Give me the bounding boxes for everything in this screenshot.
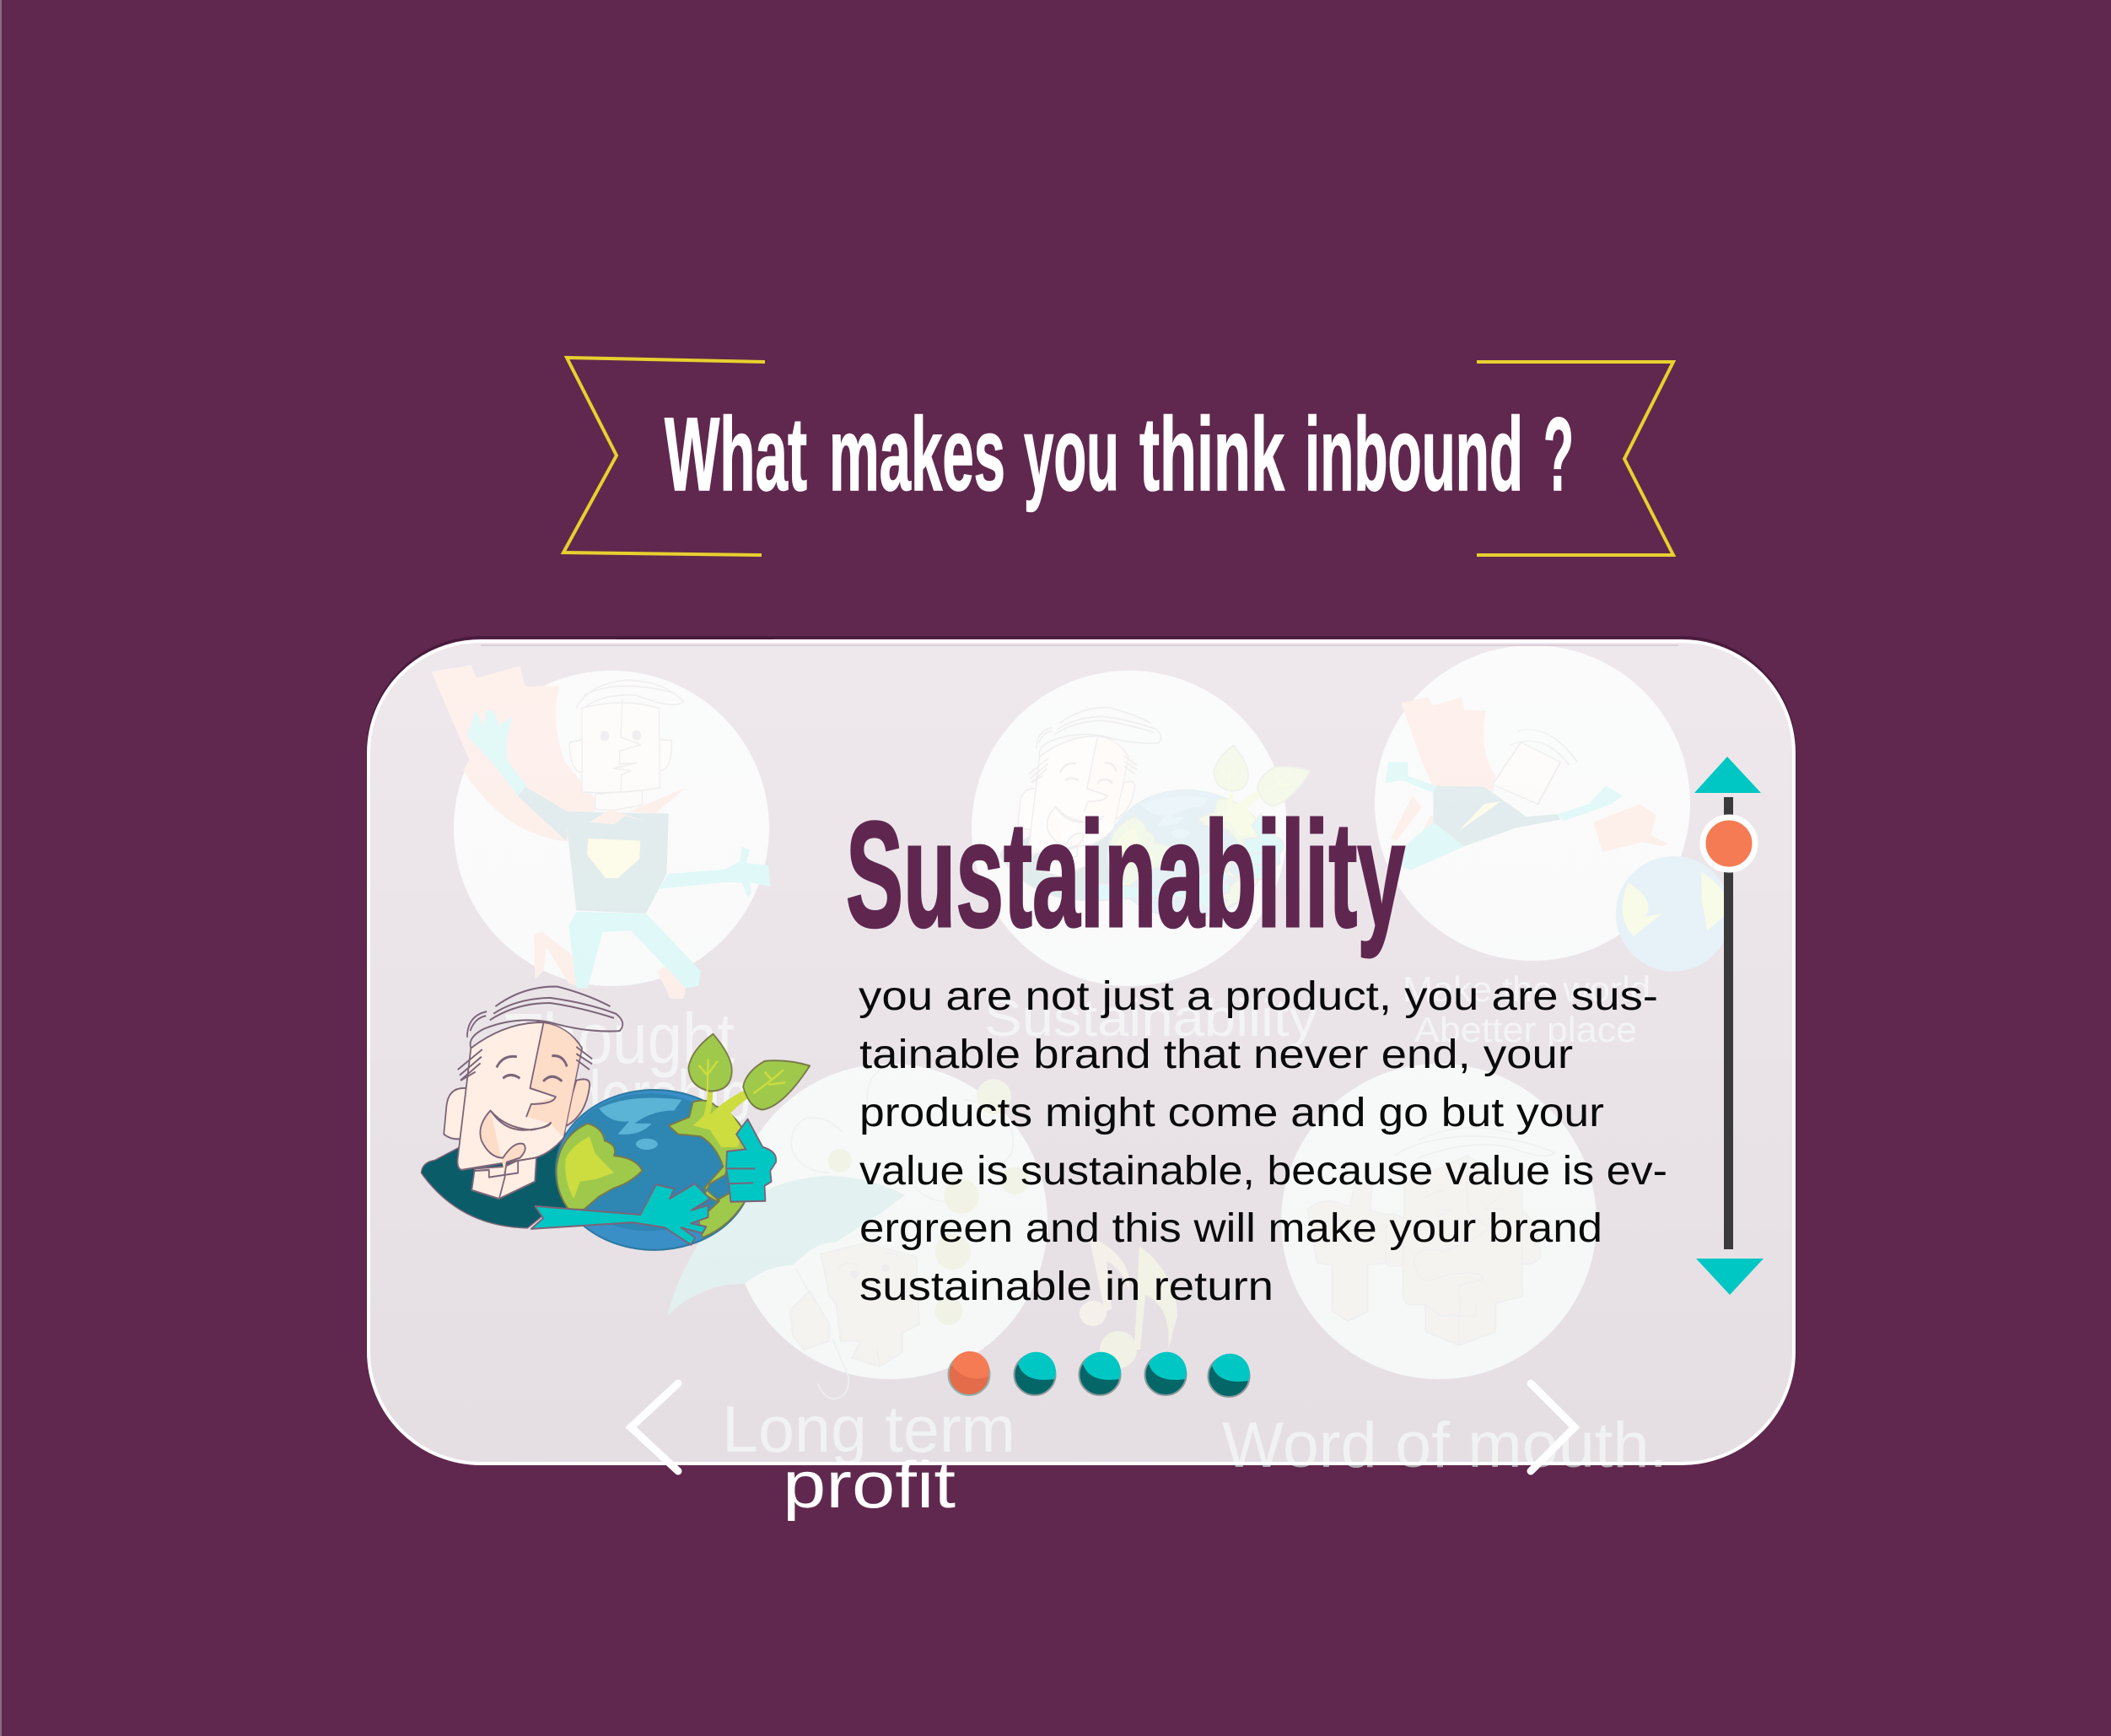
- arrow: next: [1531, 1383, 1575, 1471]
- faded slide layer behind the panel: [432, 645, 1731, 1522]
- hand gripping globe: [726, 1119, 776, 1202]
- globe highlights: [599, 1097, 681, 1135]
- arrow: previous: [631, 1383, 678, 1471]
- right ear: [565, 1079, 590, 1125]
- body text: products might come and go but your: [859, 1091, 1604, 1135]
- pagination dots: [948, 1351, 1250, 1397]
- faded circle: thought leadership: [432, 665, 770, 999]
- title: think: [1139, 397, 1284, 513]
- globe: [556, 1090, 753, 1250]
- faded label: Word of mouth: Word of mouth.: [1222, 1410, 1667, 1481]
- illustration: man hugging globe: [421, 987, 810, 1250]
- body text: tainable brand that never end, your: [859, 1032, 1573, 1077]
- body text: value is sustainable, because value is ev-: [859, 1149, 1667, 1194]
- dot 2: [1014, 1352, 1056, 1395]
- scroll up arrow: [1694, 757, 1761, 793]
- label: profit: profit: [783, 1448, 956, 1522]
- eyes and brows: [497, 1056, 567, 1081]
- hugging arm: [531, 1183, 710, 1245]
- face: [458, 1022, 582, 1170]
- body text: ergreen and this will make your brand: [859, 1206, 1602, 1251]
- faded circle: word of mouth: [1281, 1064, 1597, 1379]
- banner right bracket: [1477, 362, 1673, 555]
- man's body: [421, 1132, 576, 1228]
- title banner: ?: [1543, 397, 1574, 513]
- faded label: Long term: Long term: [722, 1392, 1015, 1466]
- left continent: [557, 1124, 642, 1210]
- faded circle: make the world a better place: [1375, 645, 1731, 972]
- body text: [859, 974, 1667, 1309]
- title: What: [665, 397, 807, 513]
- faded label: Thought leadership: leadership: [498, 1056, 751, 1135]
- faded label: Make the world, A better place: Abetter place: [1414, 1010, 1637, 1049]
- faded music notes: [1080, 1236, 1177, 1368]
- title: [665, 397, 1574, 513]
- hair: [458, 987, 622, 1081]
- left ear: [444, 1088, 466, 1139]
- banner left bracket: [563, 358, 765, 555]
- right continent: [669, 1101, 747, 1237]
- scrollbar: [1694, 757, 1764, 1295]
- dot 5: [1208, 1354, 1250, 1397]
- faded circle: long term profit: [667, 1064, 1177, 1399]
- scroll track: [1724, 797, 1733, 1249]
- mouth: [480, 1111, 551, 1174]
- dot: active: [948, 1351, 990, 1395]
- heading: Sustainability: Sustainability: [846, 790, 1405, 958]
- title: you: [1024, 397, 1119, 513]
- faded label: Sustainability: Sustainability: [984, 989, 1317, 1048]
- scroll knob: [1703, 817, 1755, 870]
- dot 3: [1080, 1352, 1121, 1395]
- body text: you are not just a product, you are sus-: [859, 974, 1658, 1019]
- faded circle: sustainability: [972, 671, 1311, 986]
- title banner: [563, 358, 1673, 555]
- dot 4: [1145, 1352, 1187, 1395]
- neck: [471, 1151, 537, 1199]
- body text: sustainable in return: [859, 1264, 1274, 1309]
- title: makes: [829, 397, 1005, 513]
- title: inbound: [1305, 397, 1523, 513]
- faded label: Make the world, A better place: Make the world: [1403, 969, 1651, 1009]
- scroll down arrow: [1696, 1259, 1764, 1295]
- faded label: Thought leadership: [498, 999, 751, 1135]
- faded label: Make the world, A better place: [1403, 969, 1651, 1049]
- leaves: [688, 1034, 732, 1092]
- panel: translucent card: [368, 636, 1795, 1464]
- sprout stems: [703, 1063, 782, 1125]
- faded label: Thought leadership: Thought: [504, 999, 735, 1078]
